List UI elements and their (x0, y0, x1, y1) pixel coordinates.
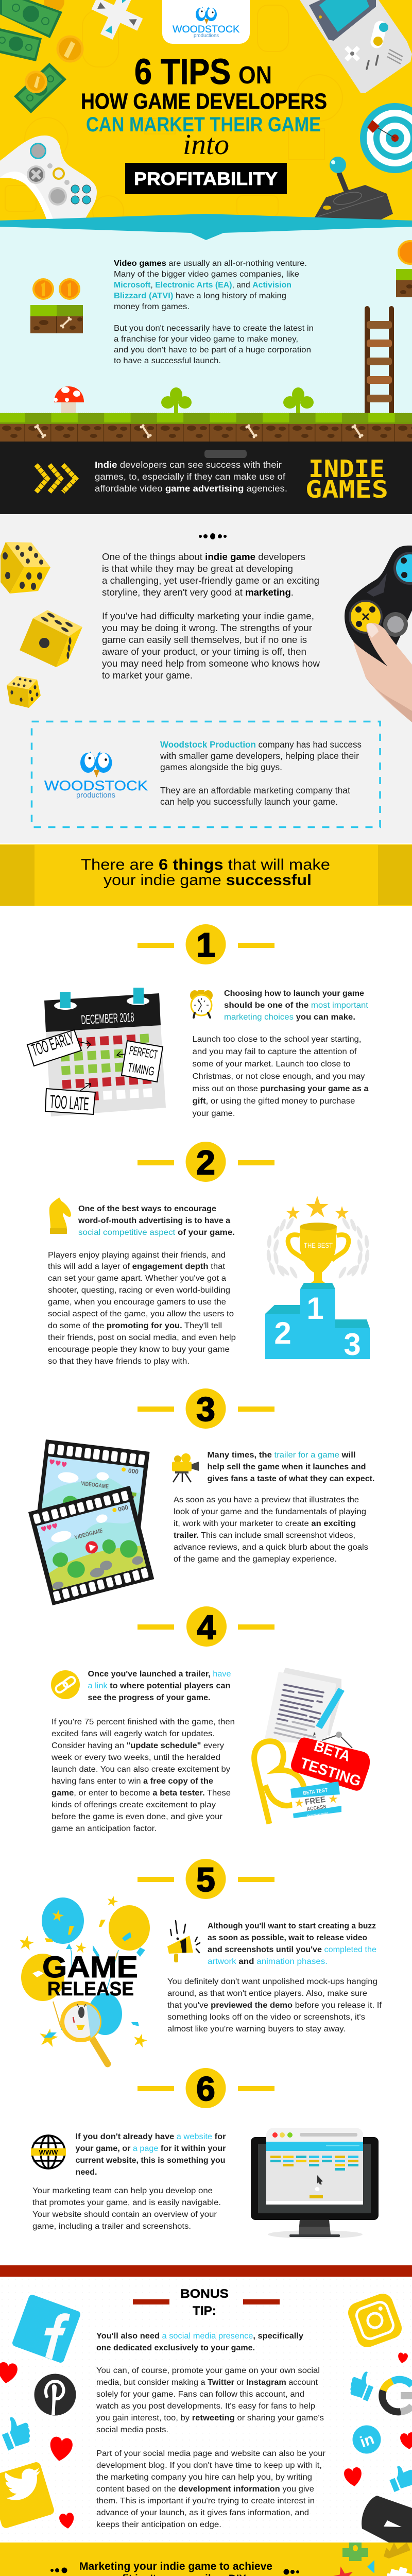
tip 6 text: game, including a trailer and screenshots. (32, 2222, 191, 2231)
bonus text: the marketing company you hire can help you, by writing (96, 2473, 312, 2482)
icon: film strips with game scene: 000 (117, 1503, 129, 1513)
indie text: games, to, especially if they can make use of (95, 471, 285, 482)
number badge 1 (138, 924, 274, 964)
indie text: affordable video game advertising agencies. (95, 483, 287, 494)
icon: game release balloons and magnifier: RELEASE (47, 1978, 134, 2000)
intro text (114, 259, 314, 365)
number badge 3: 3 (196, 1390, 215, 1428)
title (81, 52, 327, 194)
tip 4 text: a link to where potential players can (88, 1682, 231, 1690)
icon: www globe: WWW (39, 2148, 58, 2156)
intro text: Video games are usually an all-or-nothing venture. (114, 259, 307, 268)
icon: linkedin (352, 2426, 381, 2453)
tip 6 text: that promotes your game, and is easily navigable. (32, 2198, 221, 2207)
arrows (79, 1041, 125, 1091)
tip 4 text: excited fans will eagerly watch for updates. (52, 1730, 215, 1738)
dots divider (199, 533, 227, 539)
tip 5 text: artwork and animation phases. (208, 1957, 328, 1966)
number badge 2 (138, 1142, 274, 1182)
icon: pinterest (34, 2374, 76, 2415)
icon: coins and floating block (30, 278, 83, 333)
icon: chess knight (49, 1197, 71, 1234)
tip 6 text (32, 2132, 226, 2231)
marketing text: If you've had difficulty marketing your indie game, (102, 611, 314, 621)
icon: white game controller (0, 135, 97, 222)
tip 2 text: so that they have friends to play with. (48, 1357, 190, 1366)
icon: film strips with game scene: VIDEOGAME (81, 1481, 109, 1490)
tip 3 text: As soon as you have a preview that illustrates the (174, 1496, 359, 1504)
tip 6 text: Your marketing team can help you develop one (32, 2187, 213, 2195)
bonus text: development blog. If you don't have time to keep up with it, (96, 2461, 322, 2470)
icons: hearts (0, 2352, 412, 2530)
callout: woodstock box (32, 721, 380, 827)
bonus text: You'll also need a social media presence , specifically (96, 2332, 303, 2341)
tip 3 text: it, work with your marketer to create an exciting (174, 1519, 356, 1528)
tip 3 text: gives fans a taste of what they can expect. (207, 1475, 375, 1483)
tip 3 text: look of your game and the fundamentals of playing (174, 1507, 366, 1516)
bonus text: media, but consider making a Twitter or Instagram account (96, 2378, 318, 2387)
tip 4 text: launch date. You can also create excitement by (52, 1765, 230, 1774)
logo panel (162, 0, 250, 44)
label: too early (27, 1028, 81, 1066)
tip 1 text: should be one of the most important (224, 1001, 369, 1010)
intro text: Many of the bigger video games companies, like (114, 270, 299, 279)
title: into (183, 129, 229, 161)
icon: trophy on podium: 1 (306, 1291, 324, 1326)
banner: six things heading (0, 844, 412, 906)
bonus text: You can, of course, promote your game on your own social (96, 2366, 320, 2375)
tip 5 text (167, 1922, 382, 2033)
marketing text: a challenging, yet user-friendly game or an exciting (102, 575, 319, 586)
tip 2 text: game, when you encourage gamers to use the (48, 1298, 226, 1307)
marketing text: to market your game. (102, 670, 193, 681)
tip 2 text: social aspect of the game, you allow the users to (48, 1310, 234, 1318)
tip 2 text: encourage people they know to buy your game (48, 1345, 230, 1354)
icon: money and coins (0, 0, 83, 113)
pixel title (305, 455, 388, 503)
icon: dice (1, 542, 82, 708)
icon: facebook (11, 2294, 81, 2364)
dots decoration (50, 2568, 299, 2575)
tip 1 text: Christmas, or not close enough, and you may (193, 1072, 365, 1081)
tip 4 text: Once you've launched a trailer, have (88, 1670, 231, 1679)
icon: game release balloons and magnifier (18, 1895, 150, 2064)
tip 1 text: gift, or using the gifted money to purchase (193, 1097, 355, 1106)
marketing text: aware of your product, or your timing is off, then (102, 647, 306, 657)
title: CAN MARKET THEIR GAME (86, 113, 321, 136)
icon: alarm clock (190, 990, 213, 1018)
tip 4 text: If you're 75 percent finished with the game, then (52, 1718, 235, 1726)
bonus text: content based on the development information you give (96, 2485, 314, 2494)
intro text: Blizzard (ATVI) have a long history of making (114, 292, 286, 300)
banner: six things heading: There are 6 things that will make (81, 856, 330, 873)
bonus text: solely for your game. Fans can follow this account, and (96, 2390, 304, 2399)
marketing text: you may be doing it wrong. The strengths of your (102, 623, 312, 633)
callout text (160, 739, 362, 807)
tip 2 text: shooter, questing, racing or even world-building (48, 1286, 230, 1295)
tip 2 text: their friends, post on social media, and even help (48, 1333, 236, 1342)
intro text: a franchise for your video game to make money, (114, 335, 298, 344)
tip 1 text (193, 989, 369, 1118)
tip 6 text: current website, this is something you (75, 2156, 226, 2165)
icon: monitor with browser game (251, 2128, 379, 2239)
tip 5 text: that you've previewed the demo before you release it. If (167, 2001, 382, 2010)
bonus text: Part of your social media page and website can also be your (96, 2449, 326, 2458)
icon: film strips with game scene (28, 1439, 154, 1605)
title: PROFITABILITY (134, 169, 278, 189)
tip 1 text: and you may fail to capture the attention of (193, 1047, 357, 1056)
icon: game release balloons and magnifier: GAME (42, 1951, 138, 1984)
tip 5 text: something looks off on the video or screenshots, it's (167, 2013, 365, 2022)
panel: indie games dark band (0, 442, 412, 514)
tip 4 text (51, 1670, 235, 1833)
bonus text: advance of your launch, as it gives fans information, and (96, 2509, 309, 2517)
logo: WOODSTOCK (44, 778, 148, 793)
label: perfect timing: TIMING (127, 1060, 156, 1079)
label: perfect timing: PERFECT (128, 1043, 159, 1062)
icon: trophy on podium: THE BEST (304, 1241, 333, 1249)
tip 6 text: your game, or a page for it within your (75, 2144, 226, 2153)
marketing text: storyline, they aren't very good at marketing. (102, 587, 294, 598)
icon: www globe (31, 2136, 66, 2168)
callout text: with smaller game developers, helping place their (160, 751, 359, 761)
logo panel: productions (194, 33, 219, 39)
icons: thumbs up (0, 2368, 412, 2492)
tip 2 text: Players enjoy playing against their friends, and (48, 1251, 226, 1260)
icons: arcade decorations (317, 2543, 412, 2576)
title: HOW GAME DEVELOPERS (81, 89, 327, 114)
icon: clover bushes (161, 387, 314, 414)
callout text: can help you successfully launch your game. (160, 796, 338, 807)
icon: target with dart (360, 103, 412, 173)
icon: film strips with game scene: VIDEOGAME (74, 1528, 104, 1541)
intro text: But you don't necessarily have to create the latest in (114, 324, 314, 333)
tip 3 text (174, 1451, 375, 1564)
teal ribbon (0, 214, 412, 240)
marketing text (102, 552, 320, 681)
number badge 5 (138, 1859, 274, 1899)
icon: link (51, 1670, 80, 1699)
indie text (95, 460, 287, 494)
panel: marketing intro grey (0, 514, 412, 843)
icon: beta testing illustration: ACCESS (306, 1804, 327, 1812)
tip 2 text: One of the best ways to encourage (78, 1205, 216, 1213)
tip 5 text: You definitely don't want unpolished mock-ups hanging (167, 1977, 377, 1986)
tip 2 text: this will add a layer of engagement depth that (48, 1262, 226, 1271)
number badge 4 (138, 1606, 274, 1647)
tip 3 text: of the game and the gameplay experience. (174, 1555, 337, 1564)
icon: right block and coin (396, 241, 412, 297)
marketing text: you may need help from someone who knows how (102, 658, 320, 669)
tip 3 text: Many times, the trailer for a game will (207, 1451, 355, 1460)
number badge 1: 1 (196, 926, 215, 964)
marketing text: is that while they may be great at developing (102, 564, 293, 574)
bonus text: them. This is important if you're trying to create interest in (96, 2497, 315, 2505)
tip 4 text: week or every two weeks, until the heralded (51, 1753, 220, 1762)
tip 2 text (48, 1205, 236, 1366)
icon: beta testing illustration: TESTING (298, 1755, 363, 1790)
bonus heading (133, 2287, 280, 2318)
icon: hand holding controller (345, 546, 412, 722)
tip 4 text: having fans enter to win a free copy of the (52, 1777, 213, 1786)
intro text: to have a successful launch. (114, 357, 221, 365)
logo: productions (76, 791, 115, 800)
icon: beta testing illustration: BETA (312, 1738, 352, 1765)
diy heading: Marketing your indie game to achieve (79, 2561, 272, 2572)
icon: movie camera (172, 1453, 199, 1482)
marketing text: game can easily sell themselves, but if no one is (102, 635, 307, 645)
icon: trophy on podium (265, 1196, 370, 1362)
number badge 6: 6 (196, 2070, 215, 2108)
logo panel: WOODSTOCK (173, 24, 239, 35)
label: perfect timing (122, 1041, 163, 1082)
title: ON (238, 62, 272, 89)
number badge 4: 4 (197, 1608, 216, 1646)
tip 5 text: Although you'll want to start creating a buzz (208, 1922, 376, 1930)
tip 4 text: before the game is even done, and give your (52, 1812, 222, 1821)
callout text: Woodstock Production company has had success (160, 739, 362, 750)
icon: youtube (362, 2496, 412, 2543)
tip 5 text: around, as that won't entice players. Also, make sure (167, 1989, 367, 1998)
icon: ladder (365, 306, 394, 415)
bonus text: you gain interest, too, by retweeting or sharing your game's (96, 2414, 324, 2422)
number badge 2: 2 (196, 1143, 215, 1181)
bonus text: one dedicated exclusively to your game. (96, 2344, 255, 2352)
panel: header (0, 0, 412, 227)
marketing text: One of the things about indie game developers (102, 552, 305, 562)
callout text: They are an affordable marketing company that (160, 785, 350, 795)
icon: twitter (0, 2461, 55, 2529)
tip 1 text: your game. (193, 1109, 235, 1118)
ground blocks (0, 413, 412, 442)
tip 2 text: word-of-mouth advertising is to have a (78, 1216, 230, 1225)
logo (44, 751, 148, 800)
icon: beta testing illustration (254, 1668, 370, 1824)
intro text: Microsoft, Electronic Arts (EA), and Activision (114, 281, 291, 290)
tip 2 text: do some of the promoting for you. They'll tell (48, 1321, 222, 1330)
tip 5 text: and screenshots until you've completed the (208, 1945, 376, 1954)
panel: intro with platform game scene (0, 214, 412, 442)
tip 1 text: miss out on those purchasing your game as a (193, 1084, 369, 1093)
tip 3 text: trailer. This can include small screenshot videos, (174, 1531, 355, 1540)
tip 4 text: see the progress of your game. (88, 1693, 210, 1702)
icon: instagram (345, 2291, 405, 2350)
tip 4 text: game an anticipation factor. (52, 1824, 157, 1833)
tip 6 text: need. (75, 2168, 97, 2177)
bonus heading: BONUS (180, 2287, 229, 2301)
intro text: and you don't have to be part of a huge corporation (114, 346, 311, 354)
bonus text: social media posts. (96, 2426, 168, 2434)
label: too early: TOO EARLY (29, 1028, 76, 1060)
intro text: money from games. (114, 302, 190, 311)
icon: beta testing illustration: BETA TEST (303, 1787, 328, 1797)
title: 6 TIPS (134, 52, 231, 92)
tip 1 calendar (27, 988, 166, 1116)
callout text: games alongside the big guys. (160, 762, 282, 772)
tip 3 text: help sell the game when it launches and (207, 1463, 366, 1471)
indie text: Indie developers can see success with their (95, 460, 282, 470)
tip 1 text: Launch too close to the school year starting, (193, 1035, 362, 1044)
icon: megaphone (167, 1921, 200, 1962)
banner: six things heading: your indie game successful (104, 872, 312, 889)
icon: film strips with game scene: 000 (128, 1467, 139, 1476)
icon: pixel chevrons (36, 465, 76, 492)
panel: diy yellow section (0, 2543, 412, 2576)
icon: beta testing illustration: Download now! (307, 1811, 328, 1818)
label: too late (45, 1089, 95, 1114)
icon: linkedin: in (358, 2430, 376, 2451)
bonus text (96, 2332, 326, 2529)
icon: d-pad (83, 0, 151, 47)
icon: google ring (382, 2380, 412, 2412)
bonus text: keeps their anticipation on edge. (96, 2520, 221, 2529)
icon: handheld console (300, 0, 412, 93)
tip 6 text: If you don't already have a website for (75, 2132, 226, 2141)
tip 2 text: social competitive aspect of your game. (78, 1228, 235, 1237)
tip 4 text: kinds of offerings create excitement to play (52, 1801, 216, 1809)
tip 3 text: advance reviews, and a quick blurb about the goals (174, 1543, 368, 1552)
tip 5 text: almost like you're warning buyers to stay away. (167, 2025, 346, 2033)
tip 1 text: marketing choices you can make. (224, 1013, 355, 1022)
bonus text: watch as you post developments. It's easy for fans to help (96, 2402, 315, 2411)
tip 4 text: game, or enter to become a beta tester. These (52, 1789, 231, 1798)
icon: trophy on podium: 3 (344, 1327, 361, 1362)
tip 6 text: Your website should contain an overview of your (32, 2210, 217, 2219)
number badge 3 (138, 1388, 274, 1429)
tip 1 calendar: DECEMBER 2018 (81, 1010, 134, 1027)
icon: beta testing illustration: FREE (304, 1795, 326, 1807)
tip 5 text: as soon as possible, wait to release video (208, 1934, 367, 1942)
tip 1 text: some of your market. Launch too close to (193, 1060, 350, 1069)
icon: arcade joystick (315, 157, 393, 219)
icon: mushroom (54, 386, 84, 414)
panel: bonus tip (0, 2265, 412, 2543)
number badge 6 (138, 2068, 274, 2108)
tip 1 text: Choosing how to launch your game (224, 989, 364, 998)
tip 2 text: can set your game apart. Whether you've got a (48, 1274, 226, 1283)
bonus heading: TIP: (193, 2304, 216, 2318)
pixel title: GAMES (305, 476, 388, 503)
tip 4 text: Consider having an "update schedule" every (52, 1741, 224, 1750)
number badge 5: 5 (196, 1860, 215, 1899)
icon: trophy on podium: 2 (274, 1316, 291, 1350)
pixel title: INDIE (308, 455, 385, 483)
label: too late: TOO LATE (49, 1091, 90, 1114)
